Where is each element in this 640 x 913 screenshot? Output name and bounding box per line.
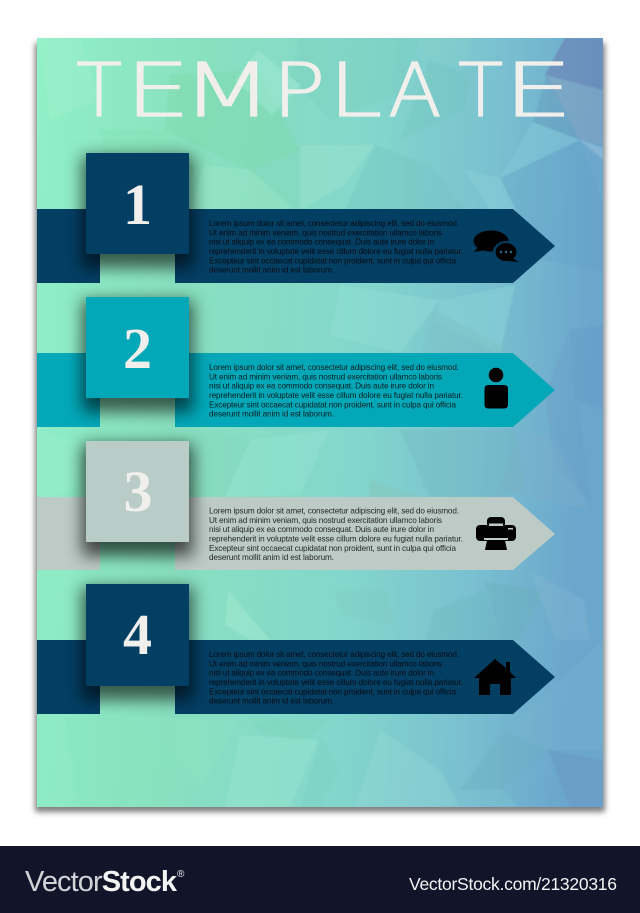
- polygon background panel: [37, 38, 603, 807]
- title: E: [503, 48, 573, 134]
- text 1: Excepteur sint occaecat cupidatat non proident, sunt in culpa qui officia: [209, 256, 456, 265]
- title: A: [388, 48, 442, 134]
- text 2: Excepteur sint occaecat cupidatat non proident, sunt in culpa qui officia: [209, 400, 456, 409]
- registered mark: ®: [177, 869, 185, 880]
- step 2: [37, 297, 555, 427]
- page drop shadow: [35, 43, 605, 812]
- square 2: [86, 297, 189, 398]
- icon: person: [484, 368, 508, 408]
- text 2: nisi ut aliquip ex ea commodo consequat. Duis aute irure dolor in: [209, 382, 434, 391]
- text 3: reprehenderit in voluptate velit esse cillum dolore eu fugiat nulla pariatur.: [209, 534, 463, 544]
- text 3: Ut enim ad minim veniam, quis nostrud exercitation ullamco laboris: [209, 516, 442, 525]
- square 4: [86, 584, 189, 686]
- footer logo: VectorStock: [25, 866, 178, 898]
- text 4: Lorem ipsum dolor sit amet, consectetur adipiscing elit, sed do eiusmod.: [209, 650, 459, 659]
- footer image id: VectorStock.com/21320316: [409, 874, 617, 894]
- step 1: [37, 153, 555, 283]
- title: [76, 48, 573, 134]
- icon: printer: [476, 517, 516, 550]
- title: L: [328, 48, 382, 134]
- number 4: 4: [123, 602, 152, 667]
- title: T: [76, 48, 122, 134]
- number 2: 2: [123, 316, 152, 381]
- text 4: nisi ut aliquip ex ea commodo consequat. Duis aute irure dolor in: [209, 669, 434, 678]
- text 4: Excepteur sint occaecat cupidatat non proident, sunt in culpa qui officia: [209, 687, 456, 696]
- footer bar: [0, 846, 640, 913]
- text 3: deserunt mollit anim id est laborum.: [209, 553, 334, 562]
- text 1: reprehenderit in voluptate velit esse cillum dolore eu fugiat nulla pariatur.: [209, 247, 463, 256]
- banner 2: [37, 353, 555, 427]
- number 3: 3: [124, 459, 152, 524]
- text 1: deserunt mollit anim id est laborum.: [209, 266, 334, 275]
- square 3: [86, 441, 189, 542]
- icon: house: [474, 659, 516, 695]
- text 4: Ut enim ad minim veniam, quis nostrud exercitation ullamco laboris: [209, 659, 442, 668]
- text 1: Lorem ipsum dolor sit amet, consectetur adipiscing elit, sed do eiusmod.: [209, 219, 459, 228]
- banner 3: [37, 497, 555, 570]
- step 4: [37, 584, 555, 714]
- text 1: [209, 219, 463, 275]
- text 2: reprehenderit in voluptate velit esse cillum dolore eu fugiat nulla pariatur.: [209, 391, 463, 400]
- text 1: nisi ut aliquip ex ea commodo consequat. Duis aute irure dolor in: [209, 238, 434, 247]
- text 4: reprehenderit in voluptate velit esse cillum dolore eu fugiat nulla pariatur.: [209, 678, 463, 687]
- title: P: [272, 48, 326, 134]
- text 3: nisi ut aliquip ex ea commodo consequat. Duis aute irure dolor in: [209, 525, 434, 534]
- text 4: deserunt mollit anim id est laborum.: [209, 697, 334, 706]
- banner 1: [37, 209, 555, 283]
- text 2: Ut enim ad minim veniam, quis nostrud exercitation ullamco laboris: [209, 372, 442, 381]
- text 2: deserunt mollit anim id est laborum.: [209, 410, 334, 419]
- step 3: [37, 441, 555, 570]
- title: T: [458, 48, 503, 134]
- text 3: Lorem ipsum dolor sit amet, consectetur adipiscing elit, sed do eiusmod.: [209, 506, 459, 516]
- square 1: [86, 153, 189, 254]
- text 2: Lorem ipsum dolor sit amet, consectetur adipiscing elit, sed do eiusmod.: [209, 363, 459, 372]
- icon: chat bubbles: [474, 230, 519, 263]
- title: E: [125, 48, 190, 134]
- title: M: [181, 48, 274, 134]
- text 2: [209, 363, 463, 419]
- text 4: [209, 650, 463, 706]
- banner 4: [37, 640, 555, 714]
- text 3: Excepteur sint occaecat cupidatat non proident, sunt in culpa qui officia: [209, 544, 456, 553]
- text 1: Ut enim ad minim veniam, quis nostrud exercitation ullamco laboris: [209, 228, 442, 237]
- text 3: [209, 506, 463, 562]
- number 1: 1: [123, 172, 152, 237]
